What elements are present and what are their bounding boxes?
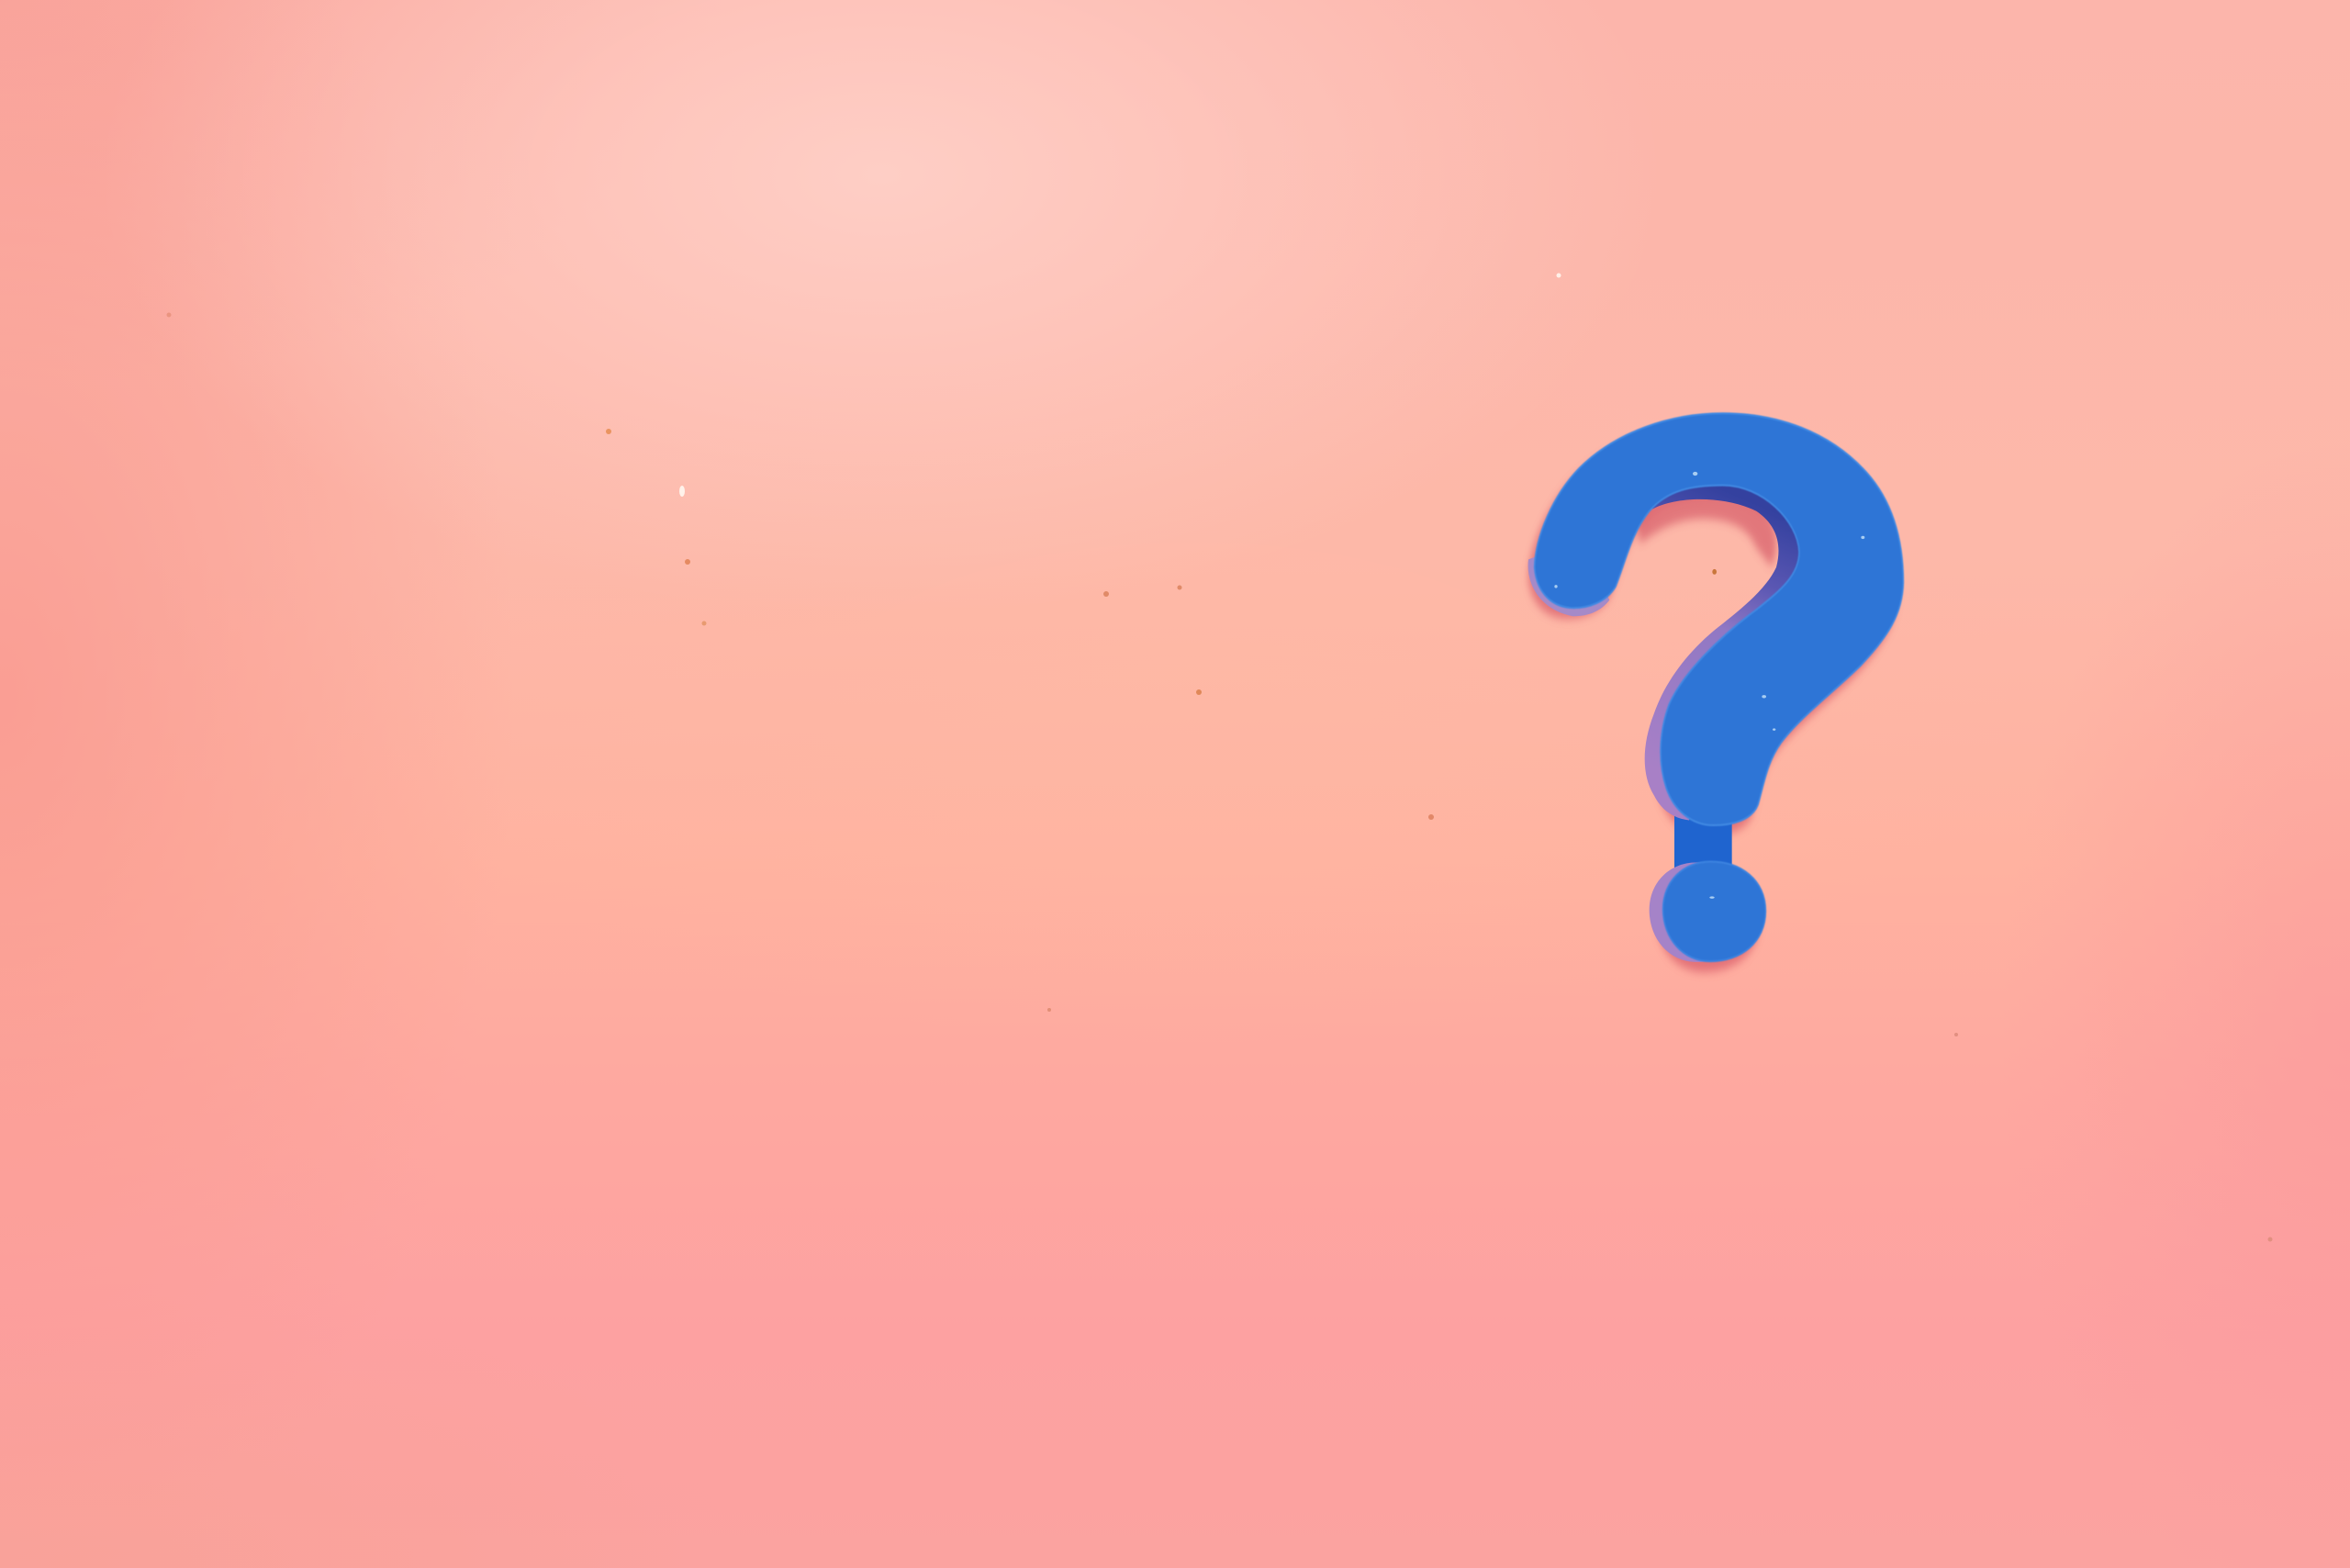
stem connecting hook and dot (1674, 807, 1732, 872)
shadow inside the hook opening (1637, 492, 1776, 567)
side wall of the body (1645, 463, 1824, 820)
side wall of the dot (1650, 862, 1751, 962)
front face (1535, 413, 1903, 961)
icon: blue question mark (1528, 413, 1903, 972)
cast shadow (1528, 424, 1897, 972)
side wall of the hook end (1528, 540, 1609, 616)
specks on the surface (167, 274, 2273, 1241)
speck in hook opening (1712, 569, 1717, 575)
small surface flecks (1554, 472, 1864, 899)
